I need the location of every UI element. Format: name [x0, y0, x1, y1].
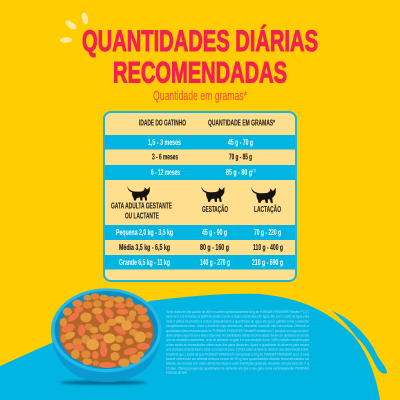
icon: bowl of kibble [51, 288, 162, 385]
subtitle: Quantidade em gramas* [153, 88, 247, 103]
text block: fine print: cada 3 partes de produto e reduza gradualmente a quantidade de água até que o gatinho coma o alimento [166, 319, 309, 323]
row: small cat: 70 g - 220 g [254, 228, 281, 237]
icon: cat lactation [252, 186, 276, 203]
adult cat table header [111, 202, 281, 220]
adult cat table header: LACTAÇÃO [254, 205, 281, 214]
row: small cat: 45 g - 90 g [202, 228, 227, 237]
row: 3 to 6 months [152, 152, 252, 162]
kitten table header [139, 118, 276, 128]
adult cat table header: GESTAÇÃO [202, 205, 228, 214]
icon: cat adult [128, 185, 150, 201]
kibble pieces [60, 293, 152, 368]
row: 6 to 12 months: 85 g - 80 g [226, 168, 252, 177]
icon: sparkle accents [60, 12, 89, 43]
text block: fine print: deixe sempre água fresca e limpa disponível. As quantidades diárias recomendadas devem ser ajustadas de acordo [166, 334, 309, 338]
kitten table header: IDADE DO GATINHO [139, 118, 186, 128]
blue background shape [0, 294, 380, 400]
bowl rim [51, 288, 162, 372]
row: medium cat: Média 3,5 kg - 6,5 kg [119, 243, 170, 252]
text block: fine print: 10 dias. Ofereça pequenas quantidades de alimento até que o seu gato coma exclusivamente PURINA® [166, 366, 309, 370]
accent swoosh [332, 311, 387, 374]
adult cat table header: OU LACTANTE [125, 212, 159, 220]
row: 6 to 12 months: 6 - 12 meses [151, 168, 180, 177]
title [82, 24, 318, 90]
row: 6 to 12 months [105, 165, 295, 180]
title: RECOMENDADAS [113, 56, 287, 90]
row: large cat: 140 g - 270 g [200, 258, 230, 267]
row: 3 to 6 months: 70 g - 85 g [229, 152, 252, 162]
bowl body [51, 330, 162, 382]
text block: fine print: considere que 1 sachê 85 g de PURINA® FRISKIES® corresponde a 20 g de PURINA® FRISKIES® seco. A cada [166, 352, 309, 356]
panel: feeding table [104, 112, 296, 281]
text block: fine print: completamente seco. Caso o alimento seja umedecido, descartar a porção não consumida. Oferecer a [166, 324, 309, 328]
row: medium cat: 110 g - 400 g [253, 243, 283, 252]
row: small cat: Pequena 2,0 kg - 3,5 kg [116, 228, 173, 237]
row: large cat [105, 255, 295, 270]
row: small cat [105, 225, 295, 240]
row: large cat: Grande 6,5 kg - 11 kg [119, 258, 170, 267]
text block: fine print: sachê oferecido ao animal reduza cerca de 20 g das quantidades diárias recomendadas na [166, 357, 309, 361]
row: medium cat [119, 243, 283, 252]
row: 6 to 12 months: (1) [252, 168, 256, 172]
text block: fine print: com as condições ambientais, nível de atividade do gato e a sua condição física. 100% nutrição completa para [166, 338, 309, 342]
adult cat table header: GATA ADULTA GESTANTE [111, 202, 172, 210]
text block: fine print: tabela. Ao mudar um novo alimento faça-o com transição gradual, durante um período de 7 a [166, 362, 309, 366]
text block: fine print: quantidade diária recomendada de PURINA® FRISKIES® Filhotes® dividida em 3 porções ao longo do dia e [166, 329, 309, 333]
text block: fine print: a fase adulta as necessidades sobre raças dos gatos diminuem. Ajuste a quantidade do alimento para manter [166, 343, 310, 347]
row: 1,5 to 3 months: 45 g - 70 g [228, 138, 253, 147]
row: 3 to 6 months: 3 - 6 meses [152, 152, 178, 162]
row: 1,5 to 3 months [105, 135, 295, 150]
text block: fine print: uma condição corporal ideal e evitar o excesso de peso. [*] Para saber se deve-se oferecer uma alimentação úmida, [166, 348, 309, 352]
row: large cat: 210 g - 690 g [252, 258, 283, 267]
text block: fine print: FRISKIES®. [166, 371, 188, 375]
row: medium cat: 80 g - 160 g [200, 243, 229, 252]
icon: cat gestation [202, 185, 224, 202]
text block: fine print [166, 310, 310, 375]
kitten table header: QUANTIDADE EM GRAMAS* [208, 118, 276, 128]
text block: fine print: parte de 0 a 8 semanas os gatinhos podem comer a ração umedecida com água. Até com 1 parte de água para [166, 315, 309, 319]
text block: fine print: *Uma xícara de chá padrão de 200 ml contém aproximadamente 80 g de PURINA® FRISKIES® Filhotes™ [1] 1 [166, 310, 309, 314]
bowl shadow [60, 381, 147, 385]
row: 1,5 to 3 months: 1,5 - 3 meses [148, 138, 181, 147]
